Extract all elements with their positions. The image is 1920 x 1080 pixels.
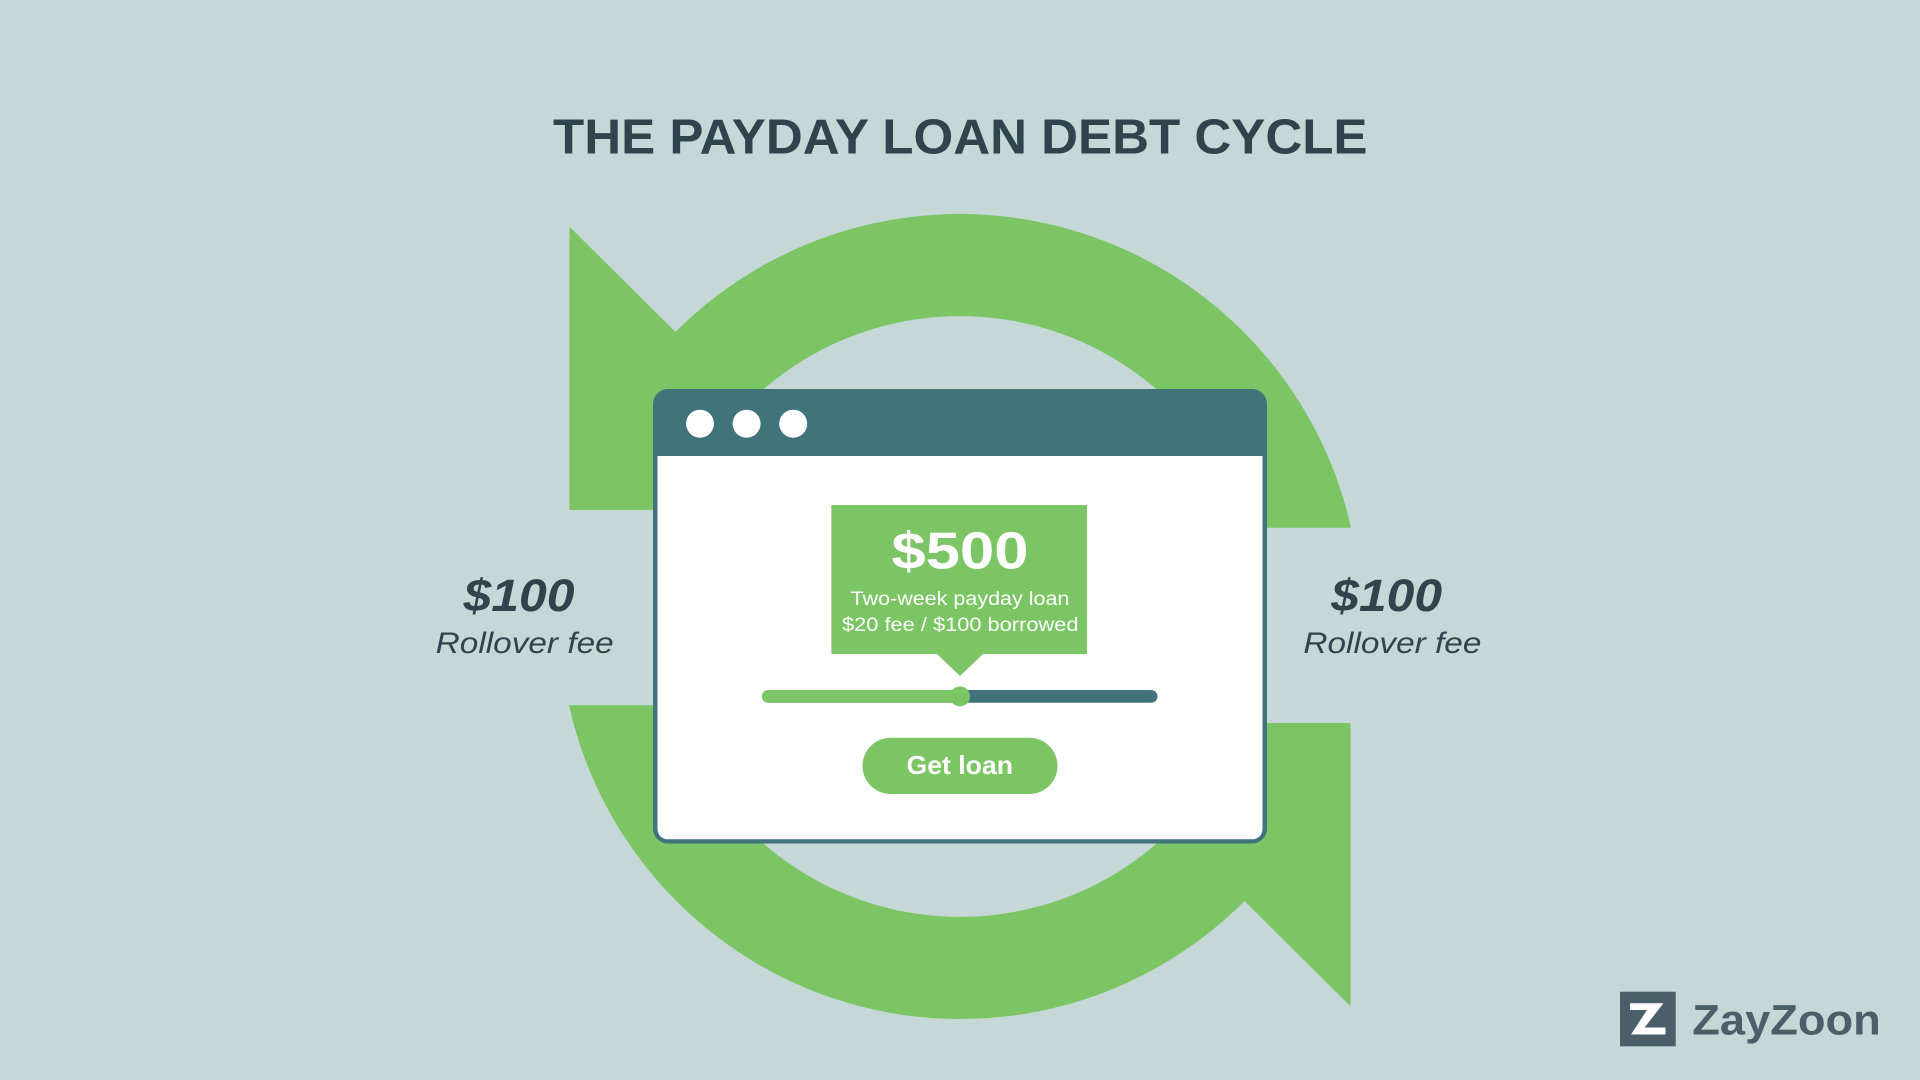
panel: browser window [653, 389, 1267, 844]
logo wordmark: ZayZoon [1692, 996, 1881, 1044]
left fee amount: $100 [462, 570, 574, 621]
window content area [658, 456, 1262, 839]
arrow: top cycle arrow [570, 214, 1351, 528]
left fee caption: Rollover fee [436, 627, 614, 660]
loan amount: $500 [892, 522, 1028, 580]
loan term: Two-week payday loan [851, 589, 1069, 610]
right fee caption: Rollover fee [1303, 627, 1481, 660]
slider fill [762, 690, 960, 703]
window control dots [686, 410, 807, 438]
logo icon [1620, 992, 1676, 1046]
logo: ZayZoon [1620, 992, 1881, 1046]
tooltip: loan amount [831, 505, 1087, 676]
left rollover fee label [436, 570, 614, 660]
button shape [862, 738, 1058, 794]
arrow: bottom cycle arrow [569, 705, 1350, 1019]
button: get loan [862, 738, 1058, 794]
loan fee: $20 fee / $100 borrowed [842, 615, 1078, 636]
button label: Get loan [906, 750, 1013, 780]
slider [762, 686, 1158, 706]
window frame [653, 389, 1267, 844]
slider track [762, 690, 1158, 703]
cycle arrows [569, 214, 1351, 1019]
right rollover fee label [1303, 570, 1481, 660]
slider knob [950, 686, 970, 706]
tooltip bubble [831, 505, 1087, 676]
right fee amount: $100 [1330, 570, 1442, 621]
title: THE PAYDAY LOAN DEBT CYCLE [553, 110, 1368, 164]
